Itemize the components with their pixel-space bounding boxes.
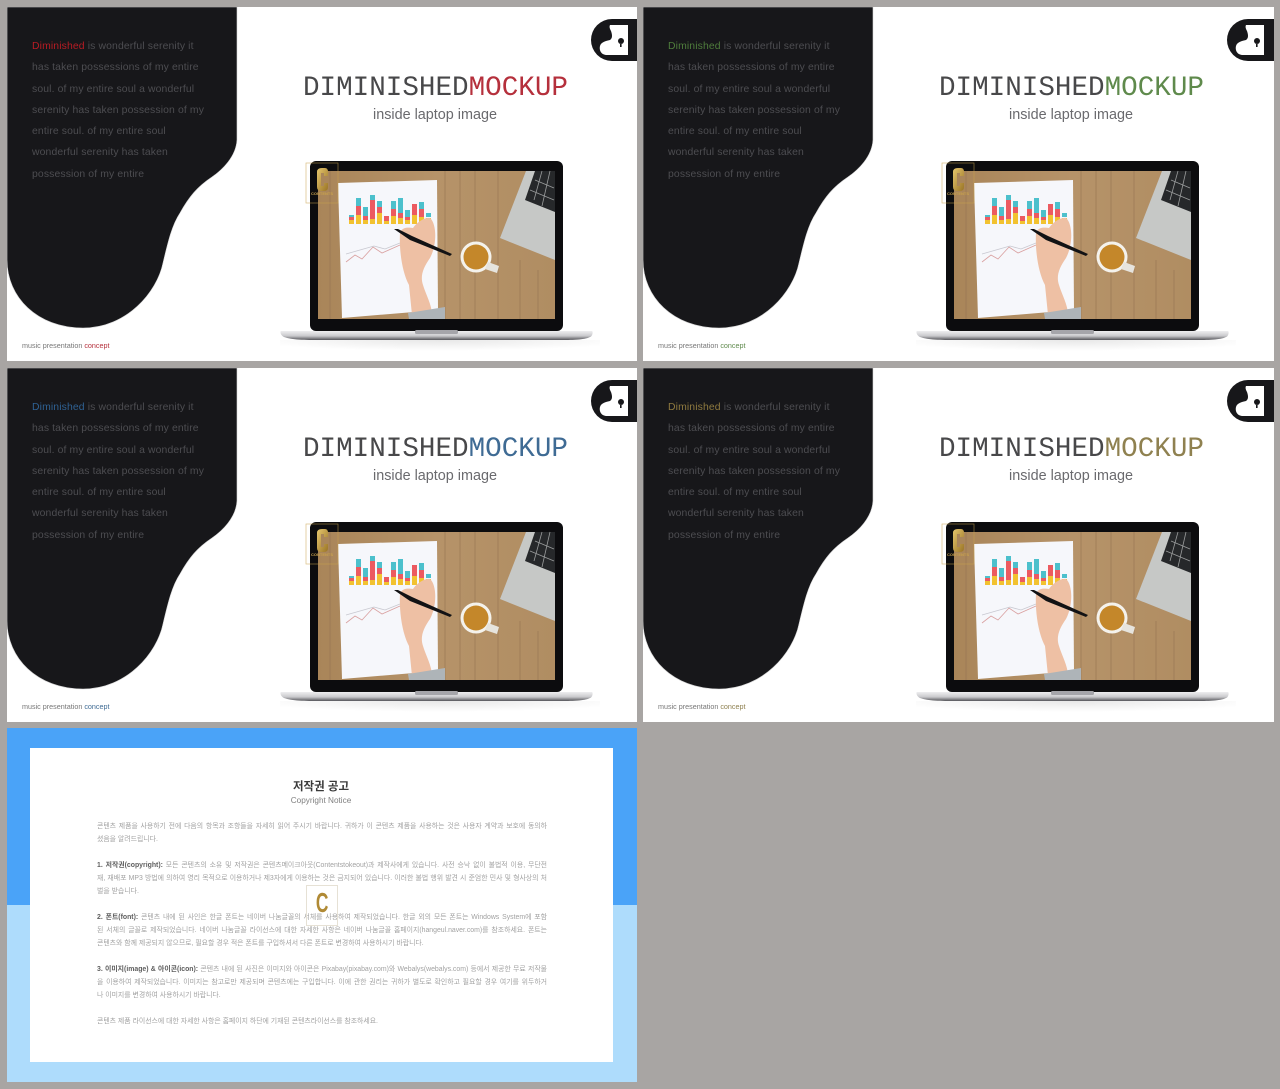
text block: closing line: 콘텐츠 제품 라이선스에 대한 자세한 사항은 홈페이지 하단에 기재된 콘텐츠라이선스를 참조하세요. bbox=[97, 1018, 378, 1025]
image: laptop with desk photo bbox=[916, 161, 1228, 347]
text block: description: soul. of my entire soul a wonderful bbox=[668, 84, 830, 95]
text block: copyright clause: 벌을 받습니다. bbox=[97, 888, 139, 895]
text block: description bbox=[668, 402, 840, 541]
shape: black blob bbox=[643, 7, 874, 328]
heading: title: DIMINISHEDMOCKUP bbox=[939, 73, 1204, 104]
image: laptop with desk photo bbox=[280, 522, 592, 708]
text block: intro: 셨음을 알려드립니다. bbox=[97, 836, 158, 843]
text block: description: soul. of my entire soul a wonderful bbox=[32, 445, 194, 456]
text block: description: serenity has taken possession of my bbox=[668, 105, 840, 116]
subtitle: inside laptop image bbox=[373, 107, 497, 123]
footer text: music presentation concept bbox=[22, 341, 110, 350]
icon: logo bbox=[1227, 380, 1274, 422]
text block: description: wonderful serenity has taken bbox=[32, 147, 168, 158]
text block: font clause: 된 서체의 글꼴로 제작되었습니다. 네이버 나눔글꼴 라이선스에 대한 자세한 사항은 네이버 나눔글꼴 홈페이지(hangeul.naver.com)를 참조하세요. 폰트는 bbox=[97, 927, 547, 934]
text block: description: entire soul. of my entire soul bbox=[32, 487, 166, 498]
text block: description: soul. of my entire soul a wonderful bbox=[32, 84, 194, 95]
panel: slide green bbox=[643, 7, 1274, 361]
text block: font clause: 콘텐츠와 함께 제공되지 않으므로, 필요할 경우 적은 폰트를 구입하셔서 다른 폰트로 변경하여 사용하시기 바랍니다. bbox=[97, 940, 424, 947]
subheading: copyright notice: Copyright Notice bbox=[291, 796, 351, 805]
text block: description: has taken possessions of my entire bbox=[32, 62, 199, 73]
text block: description: entire soul. of my entire soul bbox=[32, 126, 166, 137]
text block: image clause bbox=[97, 965, 547, 999]
footer text: music presentation concept bbox=[658, 702, 746, 711]
icon: logo bbox=[591, 19, 637, 61]
panel: slide blue bbox=[7, 368, 637, 722]
image: laptop with desk photo bbox=[916, 522, 1228, 708]
text block: description: wonderful serenity has taken bbox=[668, 147, 804, 158]
panel: copyright notice slide bbox=[7, 728, 637, 1082]
text block: font clause bbox=[97, 913, 547, 947]
text block: description: entire soul. of my entire soul bbox=[668, 126, 802, 137]
shape: black blob bbox=[7, 7, 238, 328]
text block: intro: 콘텐츠 제품을 사용하기 전에 다음의 항목과 조항들을 자세히 읽어 주시기 바랍니다. 귀하가 이 콘텐츠 제품을 사용하는 것은 사용자 계약과 보호에 동의하 bbox=[97, 823, 547, 830]
text block: description: serenity has taken possession of my bbox=[668, 466, 840, 477]
shape: black blob bbox=[643, 368, 874, 690]
shape: black blob bbox=[7, 368, 238, 690]
text block: description: wonderful serenity has taken bbox=[32, 508, 168, 519]
text block: intro bbox=[97, 822, 547, 843]
text block: image clause: 나 이미지를 변경하여 사용하시기 바랍니다. bbox=[97, 992, 221, 999]
text block: font clause: 2. 폰트(font): 콘텐츠 내에 된 사인은 한글 폰트는 네이버 나눔글꼴의 서체를 사용하여 제작되었습니다. 한글 외의 모든 폰트는 Windows System에 포함 bbox=[97, 914, 547, 921]
image: laptop with desk photo bbox=[280, 161, 592, 347]
text block: image clause: 을 이용하여 제작되었습니다. 이미지는 참고로만 제공되며 콘텐츠에는 구입합니다. 이에 관한 권리는 귀하가 별도로 확인하고 필요할 경우 여기를 위두하거 bbox=[97, 979, 547, 986]
text block: description: entire soul. of my entire soul bbox=[668, 487, 802, 498]
panel: slide gold bbox=[643, 368, 1274, 722]
subtitle: inside laptop image bbox=[1009, 468, 1133, 484]
heading: title: DIMINISHEDMOCKUP bbox=[939, 434, 1204, 465]
icon: gold C watermark bbox=[306, 885, 338, 926]
text block: description: possession of my entire bbox=[668, 169, 780, 180]
text block: description: soul. of my entire soul a wonderful bbox=[668, 445, 830, 456]
subtitle: inside laptop image bbox=[373, 468, 497, 484]
text block: description: possession of my entire bbox=[668, 530, 780, 541]
text block: description bbox=[32, 402, 204, 541]
text block: copyright clause bbox=[97, 861, 547, 895]
text block: description: has taken possessions of my entire bbox=[668, 423, 835, 434]
text block: description: has taken possessions of my entire bbox=[32, 423, 199, 434]
text block: description: wonderful serenity has taken bbox=[668, 508, 804, 519]
heading: title: DIMINISHEDMOCKUP bbox=[303, 73, 568, 104]
footer text: music presentation concept bbox=[658, 341, 746, 350]
heading: copyright title: 저작권 공고 bbox=[293, 781, 349, 793]
text block: description: Diminished is wonderful serenity it bbox=[668, 402, 830, 413]
text block: description bbox=[668, 41, 840, 180]
icon: logo bbox=[1227, 19, 1274, 61]
text block: description: Diminished is wonderful serenity it bbox=[668, 41, 830, 52]
subtitle: inside laptop image bbox=[1009, 107, 1133, 123]
panel: copyright notice card bbox=[30, 748, 613, 1062]
text block: description: has taken possessions of my entire bbox=[668, 62, 835, 73]
text block: description: serenity has taken possession of my bbox=[32, 466, 204, 477]
icon: logo bbox=[591, 380, 637, 422]
heading: title: DIMINISHEDMOCKUP bbox=[303, 434, 568, 465]
panel: slide red bbox=[7, 7, 637, 361]
text block: description: serenity has taken possession of my bbox=[32, 105, 204, 116]
text block: image clause: 3. 이미지(image) & 아이콘(icon): 콘텐츠 내에 된 사진은 이미지와 아이콘은 Pixabay(pixabay.com)와 Webalys(webalys.com) 등에서 제공한 무료 저작물 bbox=[97, 966, 547, 973]
icon: gold C watermark: C bbox=[316, 887, 328, 918]
text block: description: possession of my entire bbox=[32, 530, 144, 541]
footer text: music presentation concept bbox=[22, 702, 110, 711]
text block: description: Diminished is wonderful serenity it bbox=[32, 41, 194, 52]
text block: copyright clause: 재, 재배포 MP3 방법에 의하여 영리 목적으로 이용하거나 제3자에게 이용하는 것은 금지되어 있습니다. 이러한 불법 행위 발견 시 준엄한 민사 및 형사상의 처 bbox=[97, 875, 547, 882]
text block: copyright clause: 1. 저작권(copyright): 모든 콘텐츠의 소유 및 저작권은 콘텐츠메이크아웃(Contentstokeout)과 제작사에게 있습니다. 사전 승낙 없이 불법적 이용, 무단전 bbox=[97, 862, 547, 869]
text block: description: Diminished is wonderful serenity it bbox=[32, 402, 194, 413]
text block: description: possession of my entire bbox=[32, 169, 144, 180]
text block: description bbox=[32, 41, 204, 180]
